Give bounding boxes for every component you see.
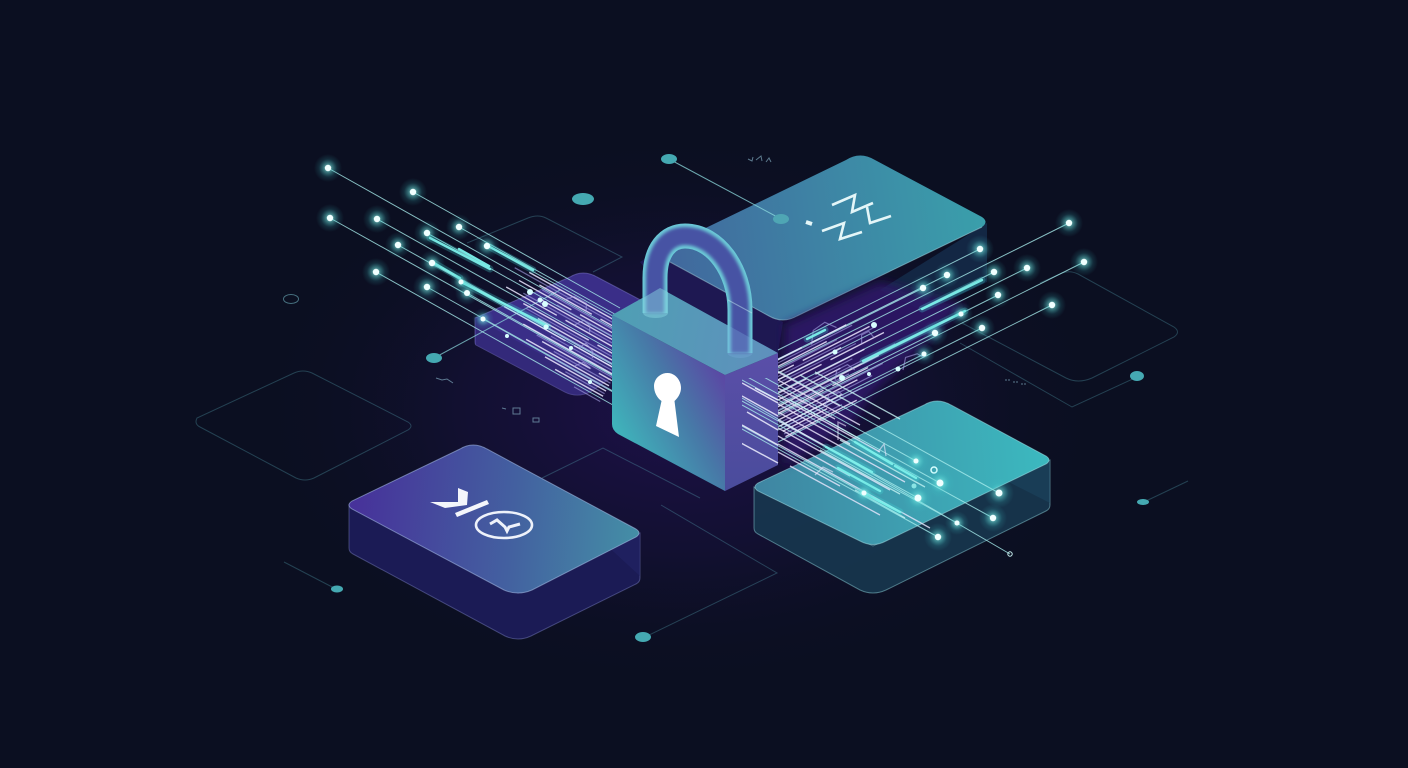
- connector: far right with node: [1137, 481, 1188, 505]
- circuit nodes: left: [505, 289, 592, 384]
- bright bars: upper right: [807, 280, 982, 361]
- connector: top node line: [661, 154, 789, 224]
- outline panel: right: [962, 272, 1178, 381]
- lock body: right face: [725, 353, 778, 491]
- card: bottom right teal platform: [754, 401, 1050, 593]
- outline panel: bottom centre: [542, 448, 777, 637]
- bright bars: left: [430, 238, 548, 326]
- padlock: [612, 236, 778, 491]
- shackle right leg base: [728, 325, 752, 358]
- ring marker: [284, 294, 298, 304]
- data stream: left burst lines: [328, 168, 639, 409]
- data stream: lower right burst lines: [741, 351, 1010, 554]
- data stream: upper right burst lines: [747, 223, 1084, 442]
- icon: circled wave: [476, 512, 532, 538]
- bright bars: lower right: [826, 442, 916, 512]
- micro marks: [436, 156, 1026, 422]
- card: bottom left platform: [349, 445, 640, 639]
- icon: zigzag glyphs on top right card: [806, 195, 891, 239]
- icon: chevron and bar: [430, 488, 489, 517]
- card: top right teal platform: [640, 156, 987, 353]
- connector: lower left with node: [284, 562, 343, 592]
- lock body: front face: [612, 315, 725, 491]
- shackle left leg base: [643, 288, 668, 318]
- lock body: top face: [612, 288, 778, 375]
- glowing nodes: lower right burst: [852, 448, 1014, 556]
- dense circuit traces: crosshatch and card: [778, 372, 930, 528]
- outline panel: far left: [196, 371, 411, 480]
- card: left purple platform: [475, 273, 650, 395]
- dense circuit traces: lock face start: [741, 383, 778, 463]
- connector: left node line: [426, 290, 560, 363]
- circuit nodes: upper right: [832, 322, 900, 381]
- dense circuit traces: upper right: [747, 290, 927, 437]
- shackle card edge reflection: [728, 300, 752, 313]
- keyhole: [654, 373, 681, 437]
- connector: right lower line with node: [960, 343, 1144, 407]
- illustration: padlock with data streams: [196, 154, 1188, 642]
- node: bottom centre dot: [635, 632, 651, 642]
- glowing nodes: left burst: [314, 154, 500, 330]
- dense circuit traces: left: [478, 264, 639, 402]
- shackle: [643, 236, 752, 358]
- outline panel: upper left: [467, 216, 622, 272]
- glowing nodes: upper right burst: [910, 209, 1098, 365]
- glow: purple band behind streams: [785, 282, 965, 465]
- node: top left dot: [572, 193, 594, 205]
- card edge highlight: [670, 227, 982, 320]
- background purple glow: [250, 130, 1110, 690]
